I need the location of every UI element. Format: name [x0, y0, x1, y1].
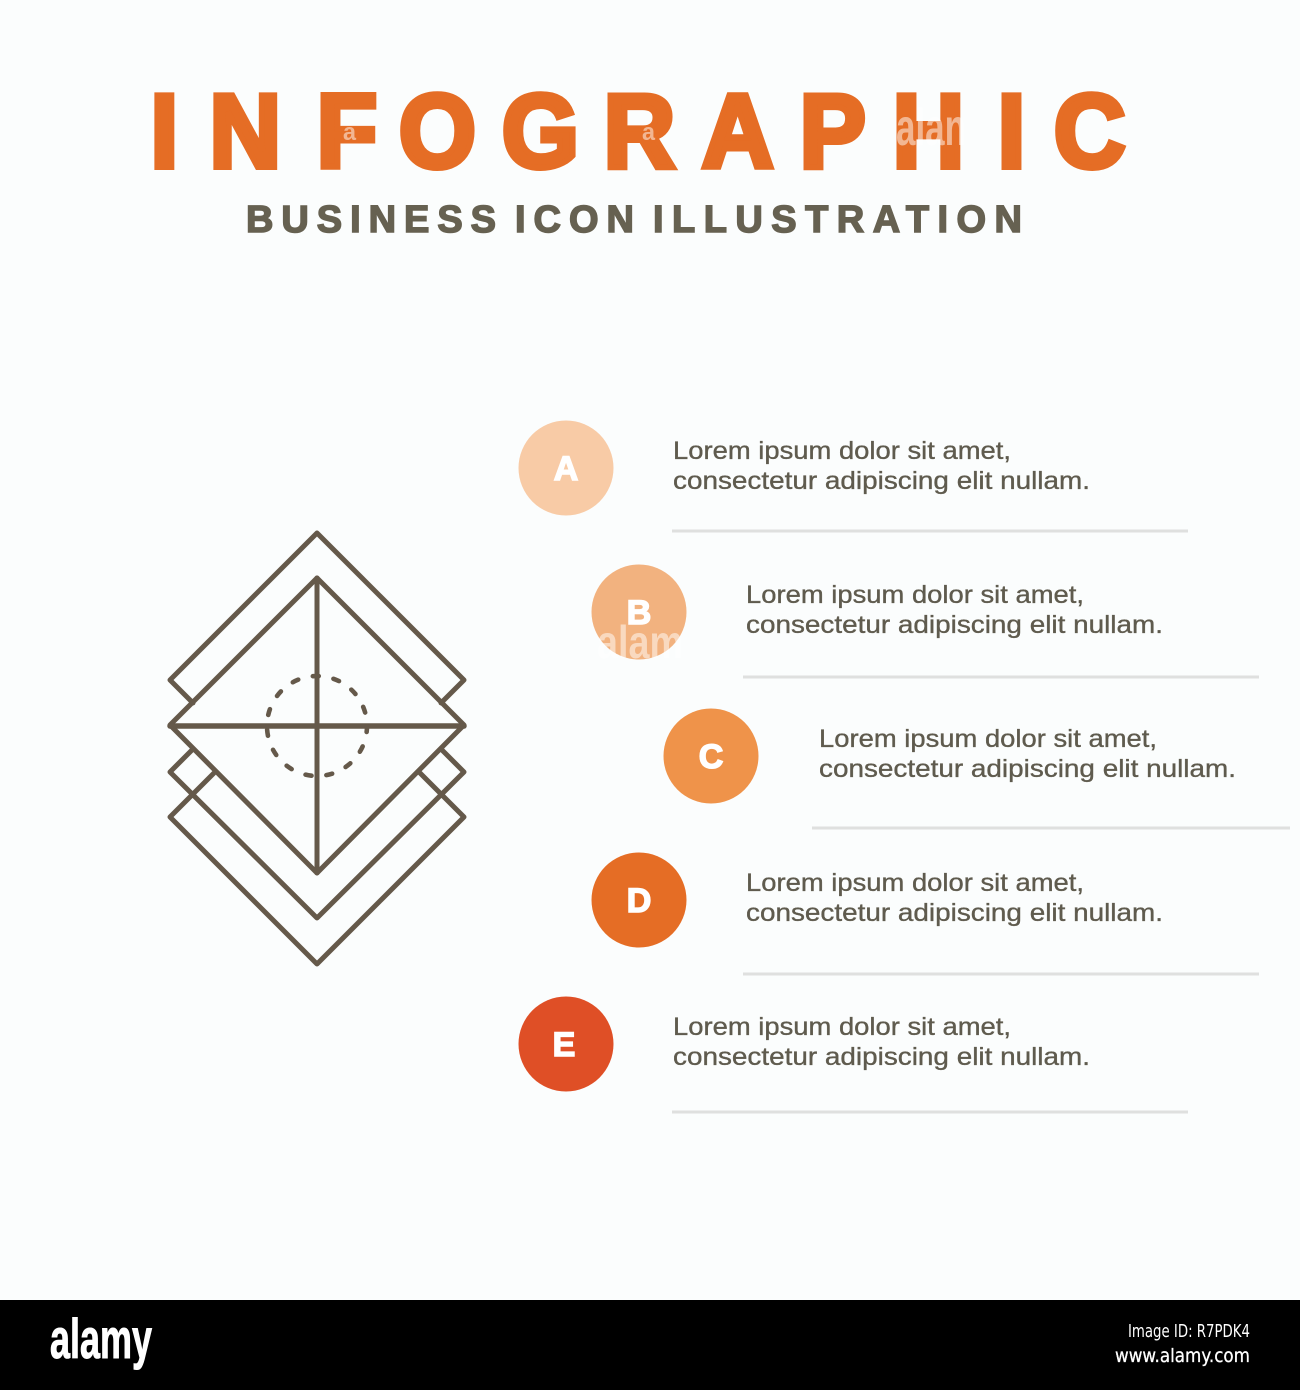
step E [518, 996, 1188, 1114]
step B [592, 564, 1259, 678]
title watermark fragments: alan [896, 99, 966, 157]
main diamond with cross [170, 578, 464, 873]
subtitle [246, 199, 1022, 241]
step C [664, 708, 1290, 830]
step D text: Lorem ipsum dolor sit amet, [746, 869, 1084, 897]
step C text: Lorem ipsum dolor sit amet, [819, 725, 1157, 753]
step B text: Lorem ipsum dolor sit amet, [746, 581, 1084, 609]
subtitle: ILLUSTRATION [653, 199, 1022, 241]
bottom layer diamond [170, 772, 464, 964]
footer logo: alamy [50, 1307, 152, 1370]
step A text: Lorem ipsum dolor sit amet, [673, 437, 1011, 465]
top layer diamond [170, 533, 464, 703]
title watermark fragments [343, 99, 966, 157]
step A [518, 420, 1188, 532]
step C: C [699, 738, 723, 776]
step E: E [553, 1026, 575, 1064]
step D text: consectetur adipiscing elit nullam. [746, 899, 1163, 927]
dashed circle [267, 676, 367, 776]
step A: A [554, 450, 578, 488]
footer bar [0, 1300, 1300, 1390]
step B text: consectetur adipiscing elit nullam. [746, 611, 1163, 639]
step B: B [627, 594, 651, 632]
image id: Image ID: R7PDK4 [1128, 1321, 1250, 1342]
step D: D [627, 882, 651, 920]
title watermark fragments: a [642, 119, 656, 146]
website: www.alamy.com [1115, 1345, 1250, 1367]
step D [592, 852, 1259, 976]
title watermark fragments: a [343, 119, 357, 146]
title: INFOGRAPHIC [151, 74, 1125, 190]
step E text: Lorem ipsum dolor sit amet, [673, 1013, 1011, 1041]
step B watermark: alam [597, 616, 683, 668]
subtitle: BUSINESS [246, 199, 496, 241]
step A text: consectetur adipiscing elit nullam. [673, 467, 1090, 495]
step C text: consectetur adipiscing elit nullam. [819, 755, 1236, 783]
third layer diamond [170, 749, 464, 918]
icon: stacked diamond layers [170, 533, 464, 964]
step E text: consectetur adipiscing elit nullam. [673, 1043, 1090, 1071]
subtitle: ICON [515, 199, 634, 241]
